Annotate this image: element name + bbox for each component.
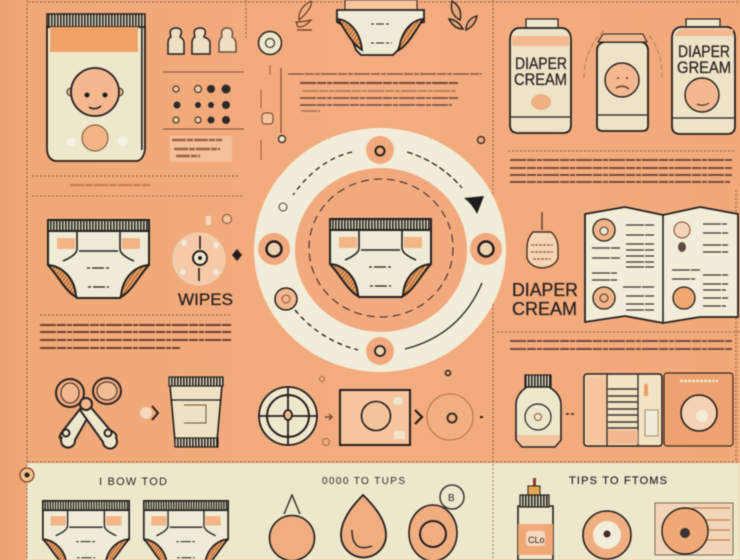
node: left [258,233,290,265]
heading: middle tips: 0000 TO TUPS [322,476,405,487]
icon: framed orange disc [655,503,733,555]
text block: top right [510,160,732,182]
timeline markers [261,65,286,160]
panel: bottle diaper cream 2 [672,19,735,134]
icon: pill bottle [516,375,561,447]
panel: bottle diaper cream 2: GREAM [677,58,731,77]
label: diaper cream [512,280,578,319]
icon: top-left round badge [258,32,282,54]
arrow: between scissors and cup [140,406,158,420]
heading: how to: I BOW TOD [99,476,167,488]
icon: cup [169,377,223,447]
icon: baby face [67,68,123,116]
text block: left middle [40,325,231,348]
icon: small swirl [279,203,287,211]
text block: right middle [510,341,732,349]
label: diaper cream: DIAPER [512,280,578,300]
panel: striped steps [584,374,662,446]
panel: bottle diaper cream 1: CREAM [514,70,567,89]
panel: orange circle card [664,373,733,446]
label: wipes: WIPES [178,290,233,309]
small diamond arrow [232,249,242,261]
icon: left leaf [296,1,312,30]
panel: bottle diaper cream 1 [510,19,571,133]
dot marker [20,468,34,482]
heading: right tips: TIPS TO FTOMS [569,475,667,487]
chart: central ring diagram [254,128,506,372]
diaper: top centre [337,0,424,55]
small icons above dial [206,214,232,225]
dot grid [163,72,244,129]
label: diaper cream: CREAM [512,299,577,319]
icon: cream dish [583,511,631,559]
small ring marker [478,136,484,144]
text block: centre top [288,74,482,111]
icon: wipes dial [173,233,225,285]
icon: ring circle [409,505,457,560]
diaper: left [48,220,149,298]
icon: nozzle bottle: CLo [528,535,545,545]
arrow: chevron [415,410,422,424]
arrow [464,196,484,214]
icon: drop [341,495,386,558]
icon: hanging tag jar [527,212,558,268]
short dash arrow [566,413,576,415]
small dots [320,376,330,446]
diaper: bottom left 2 [144,501,228,560]
panel: open brochure [585,207,738,323]
icon: letter badge [440,485,464,509]
icon: crosshair target [259,387,317,445]
icon: scissors [56,378,121,449]
icon: round badge with dot [427,394,483,440]
node: top [366,136,394,164]
icon: right leaf [449,1,477,30]
diaper: central [330,219,431,297]
node: bottom [366,337,394,365]
panel: baby product jar [47,14,145,161]
diaper: bottom left 1 [43,501,129,560]
icon: framed circle [340,390,410,445]
icon: circle with peak [270,495,314,560]
icon: nozzle bottle [518,478,553,560]
node: right [470,233,502,265]
bottom cream band [27,463,740,560]
panel: bottle face [584,30,662,131]
caption line [70,184,150,186]
text block: small note [170,136,232,162]
panel: bottle diaper cream 2: DIAPER [678,42,730,61]
icon: letter badge: B [448,493,455,504]
node: lower left [275,288,297,310]
icon group: three figures [168,28,236,54]
panel: bottle diaper cream 1: DIAPER [515,54,567,73]
small arrow [325,414,332,420]
